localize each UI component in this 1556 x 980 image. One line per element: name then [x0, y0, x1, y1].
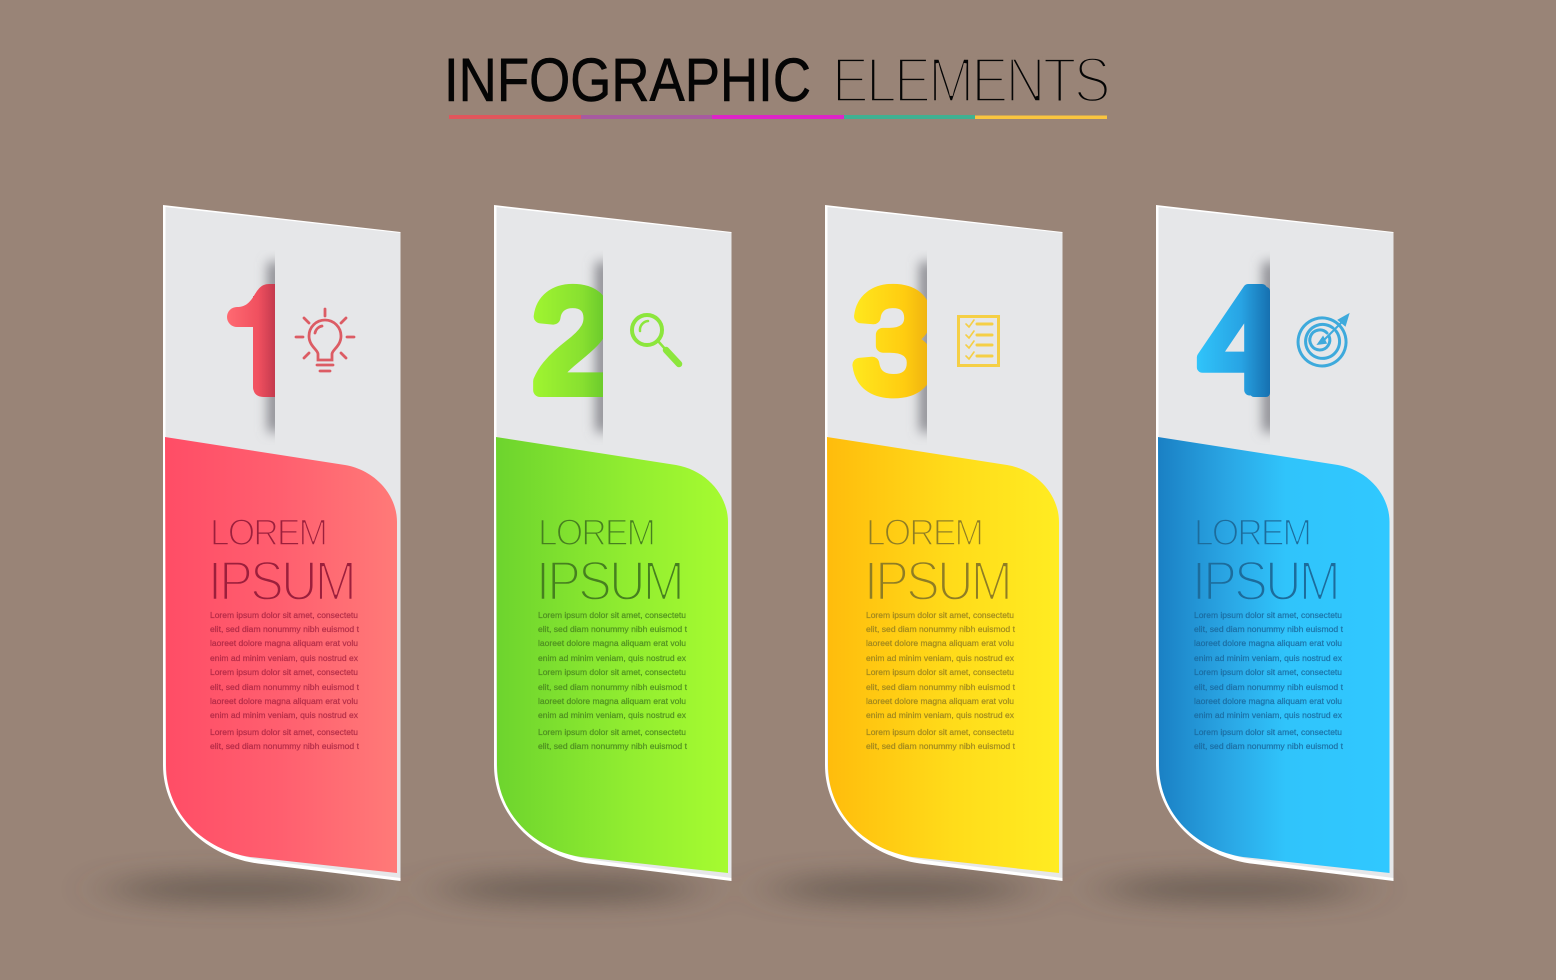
- body text: elit, sed diam nonummy nibh euismod t: [866, 682, 1016, 692]
- title colour rule: [449, 115, 1107, 119]
- number 4 stem thickening: [1250, 287, 1270, 397]
- body text: Lorem ipsum dolor sit amet, consectetu: [210, 610, 358, 620]
- title word: infographic: INFOGRAPHIC: [444, 46, 811, 114]
- icon: light bulb: [296, 309, 354, 371]
- heading: lorem ipsum: [864, 512, 1010, 612]
- body text: [866, 610, 1016, 751]
- number 4: 4: [1199, 258, 1280, 421]
- body text: Lorem ipsum dolor sit amet, consectetu: [210, 667, 358, 677]
- body text: Lorem ipsum dolor sit amet, consectetu: [538, 667, 686, 677]
- body text: elit, sed diam nonummy nibh euismod t: [538, 682, 688, 692]
- heading: lorem ipsum: [208, 512, 354, 612]
- infographic canvas: [106, 58, 1394, 913]
- panel: card 3: [825, 205, 1062, 881]
- body text: elit, sed diam nonummy nibh euismod t: [1194, 682, 1344, 692]
- heading: lorem ipsum: LOREM: [538, 512, 654, 553]
- body text: Lorem ipsum dolor sit amet, consectetu: [866, 727, 1014, 737]
- body text: laoreet dolore magna aliquam erat volu: [538, 696, 686, 706]
- body text: enim ad minim veniam, quis nostrud ex: [866, 710, 1015, 720]
- heading: lorem ipsum: [1192, 512, 1338, 612]
- heading: lorem ipsum: IPSUM: [864, 549, 1010, 612]
- fold shadow: [268, 262, 282, 432]
- body text: Lorem ipsum dolor sit amet, consectetu: [1194, 727, 1342, 737]
- body text: [538, 610, 688, 751]
- body text: elit, sed diam nonummy nibh euismod t: [1194, 624, 1344, 634]
- body text: elit, sed diam nonummy nibh euismod t: [538, 741, 688, 751]
- body text: Lorem ipsum dolor sit amet, consectetu: [210, 727, 358, 737]
- body text: enim ad minim veniam, quis nostrud ex: [210, 710, 359, 720]
- body text: elit, sed diam nonummy nibh euismod t: [210, 741, 360, 751]
- body text: Lorem ipsum dolor sit amet, consectetu: [1194, 667, 1342, 677]
- body text: enim ad minim veniam, quis nostrud ex: [538, 653, 687, 663]
- number 1: 1: [224, 262, 303, 421]
- body text: enim ad minim veniam, quis nostrud ex: [1194, 653, 1343, 663]
- body text: enim ad minim veniam, quis nostrud ex: [866, 653, 1015, 663]
- panel: card 1: [163, 205, 400, 881]
- body text: Lorem ipsum dolor sit amet, consectetu: [866, 667, 1014, 677]
- body text: laoreet dolore magna aliquam erat volu: [538, 638, 686, 648]
- body text: Lorem ipsum dolor sit amet, consectetu: [1194, 610, 1342, 620]
- title: [444, 44, 1108, 116]
- ground shadows: [108, 877, 1361, 901]
- panel: card 2: [494, 205, 732, 881]
- heading: lorem ipsum: IPSUM: [1192, 549, 1338, 612]
- panel: yellow content: [827, 437, 1059, 873]
- heading: lorem ipsum: IPSUM: [536, 549, 682, 612]
- number 1 flag: [227, 284, 275, 345]
- body text: laoreet dolore magna aliquam erat volu: [210, 696, 358, 706]
- icon: magnifier: [632, 315, 679, 364]
- body text: elit, sed diam nonummy nibh euismod t: [210, 624, 360, 634]
- number 2: 2: [533, 262, 612, 421]
- body text: Lorem ipsum dolor sit amet, consectetu: [538, 727, 686, 737]
- body text: Lorem ipsum dolor sit amet, consectetu: [538, 610, 686, 620]
- panel: card 4: [1156, 205, 1394, 881]
- body text: elit, sed diam nonummy nibh euismod t: [1194, 741, 1344, 751]
- body text: enim ad minim veniam, quis nostrud ex: [1194, 710, 1343, 720]
- body text: laoreet dolore magna aliquam erat volu: [1194, 638, 1342, 648]
- body text: laoreet dolore magna aliquam erat volu: [866, 696, 1014, 706]
- body text: elit, sed diam nonummy nibh euismod t: [538, 624, 688, 634]
- body text: Lorem ipsum dolor sit amet, consectetu: [866, 610, 1014, 620]
- body text: elit, sed diam nonummy nibh euismod t: [210, 682, 360, 692]
- heading: lorem ipsum: [536, 512, 682, 612]
- body text: laoreet dolore magna aliquam erat volu: [1194, 696, 1342, 706]
- panel: blue content: [1158, 437, 1390, 873]
- number 3: 3: [854, 262, 933, 421]
- fold shadow: [920, 262, 934, 432]
- heading: lorem ipsum: LOREM: [866, 512, 982, 553]
- icon: checklist: [958, 316, 998, 366]
- title word: elements: ELEMENTS: [832, 44, 1108, 116]
- body text: elit, sed diam nonummy nibh euismod t: [866, 624, 1016, 634]
- panel: green content: [496, 437, 728, 873]
- icon: target: [1298, 315, 1348, 366]
- fold shadow: [596, 262, 610, 432]
- body text: enim ad minim veniam, quis nostrud ex: [538, 710, 687, 720]
- heading: lorem ipsum: IPSUM: [208, 549, 354, 612]
- body text: laoreet dolore magna aliquam erat volu: [210, 638, 358, 648]
- body text: elit, sed diam nonummy nibh euismod t: [866, 741, 1016, 751]
- body text: enim ad minim veniam, quis nostrud ex: [210, 653, 359, 663]
- fold shadow: [1263, 262, 1277, 432]
- heading: lorem ipsum: LOREM: [1194, 512, 1310, 553]
- heading: lorem ipsum: LOREM: [210, 512, 326, 553]
- body text: [1194, 610, 1344, 751]
- panel: red content: [165, 437, 397, 873]
- body text: laoreet dolore magna aliquam erat volu: [866, 638, 1014, 648]
- body text: [210, 610, 360, 751]
